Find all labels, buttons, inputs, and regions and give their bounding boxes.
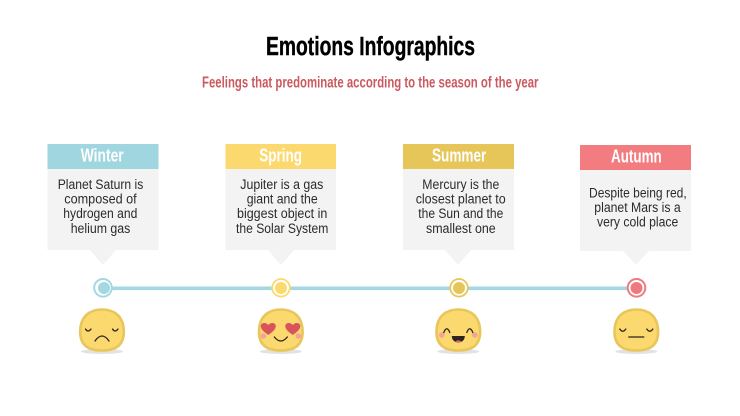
panel: winter xyxy=(48,144,158,265)
summer heading: Summer xyxy=(432,146,486,166)
summer text: the Sun and the xyxy=(418,206,503,221)
autumn text: Despite being red, xyxy=(589,185,687,200)
spring text: giant and the xyxy=(247,192,318,207)
spring text: biggest object in xyxy=(237,206,327,221)
autumn text xyxy=(589,185,687,230)
spring text: the Solar System xyxy=(236,221,328,236)
panel: spring xyxy=(226,144,336,265)
autumn text: planet Mars is a xyxy=(594,200,681,215)
subtitle: Feelings that predominate according to the season of the year xyxy=(202,75,538,92)
icon: laughing face xyxy=(436,310,480,354)
spring header xyxy=(226,144,336,169)
autumn callout background xyxy=(580,170,691,265)
winter text: helium gas xyxy=(71,221,131,236)
autumn header xyxy=(580,145,691,170)
winter text: composed of xyxy=(64,192,137,207)
icon: neutral face xyxy=(614,310,658,354)
icon: sad face xyxy=(80,310,124,354)
autumn heading: Autumn xyxy=(611,147,662,167)
title: Emotions Infographics xyxy=(266,33,475,61)
summer header xyxy=(403,144,514,169)
spring text xyxy=(236,177,328,236)
autumn text: very cold place xyxy=(597,215,678,230)
autumn marker xyxy=(628,279,645,297)
summer marker xyxy=(450,279,468,297)
winter text: Planet Saturn is xyxy=(58,177,144,192)
spring marker xyxy=(272,279,290,297)
summer text: smallest one xyxy=(426,221,496,236)
summer text: closest planet to xyxy=(416,192,506,207)
spring text: Jupiter is a gas xyxy=(240,177,324,192)
summer callout background xyxy=(403,169,514,265)
summer text xyxy=(416,177,506,236)
panel: summer xyxy=(403,144,514,265)
summer text: Mercury is the xyxy=(422,177,499,192)
winter heading: Winter xyxy=(81,146,124,166)
icon: in-love face xyxy=(259,310,303,354)
panel: autumn xyxy=(580,145,691,265)
winter header xyxy=(48,144,158,169)
spring callout background xyxy=(226,169,336,265)
winter marker xyxy=(94,279,112,297)
spring heading: Spring xyxy=(259,146,302,166)
winter callout background xyxy=(48,169,158,265)
timeline line xyxy=(103,286,636,290)
winter text xyxy=(58,177,144,236)
winter text: hydrogen and xyxy=(63,206,137,221)
